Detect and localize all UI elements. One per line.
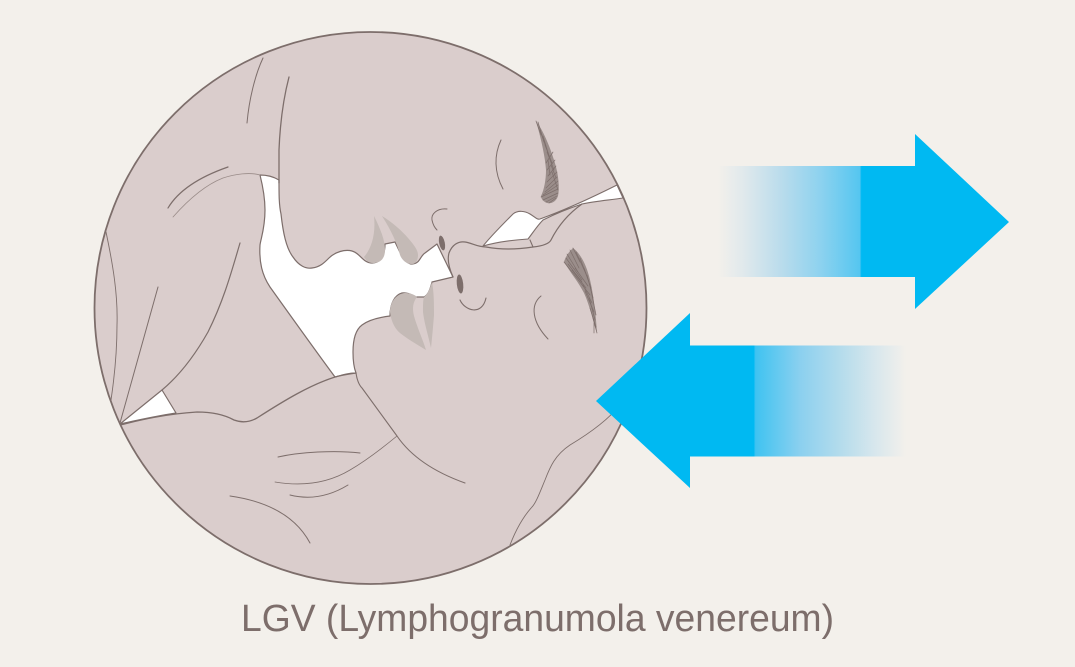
lower face jaw [356,373,465,483]
lower nostril [456,274,464,294]
shoulder top line [120,373,356,425]
shoulder curve [162,243,240,390]
collarbone crease [230,496,310,543]
small nose fold [530,240,533,247]
back line [106,232,117,400]
caption: LGV (Lymphogranumola venereum) [241,598,834,640]
circle fill [94,32,646,584]
upper nostril [438,236,446,250]
arrow: pointing left [596,313,906,488]
upper lips shading [364,216,418,264]
circle outline [94,32,646,584]
neck crease long [275,436,397,484]
lower nose curve [460,298,486,310]
hair line [247,58,263,123]
right shoulder line [510,414,612,546]
neck crease top [278,452,360,457]
lower face nose and cheek outline [448,204,582,277]
white gap between faces [260,175,453,377]
arm crease lower [173,174,260,217]
white triangle at lower left [120,390,176,424]
arm line [120,287,158,423]
white gap near the upper neck [483,185,623,246]
lower closed eye [534,296,548,339]
arm crease upper [168,167,228,208]
lower eyebrow [564,248,597,333]
illustration linework clipped to the circle [106,58,623,545]
upper nose curve [432,209,447,230]
upper closed eye [496,140,503,189]
lower lips shading [390,282,434,350]
upper face hairline [279,77,289,183]
upper eyebrow [536,121,559,203]
infographic canvas [94,31,1009,639]
arrow: pointing right [718,134,1009,309]
neck crease small [290,485,348,497]
circular illustration: kissing couple [94,32,646,584]
